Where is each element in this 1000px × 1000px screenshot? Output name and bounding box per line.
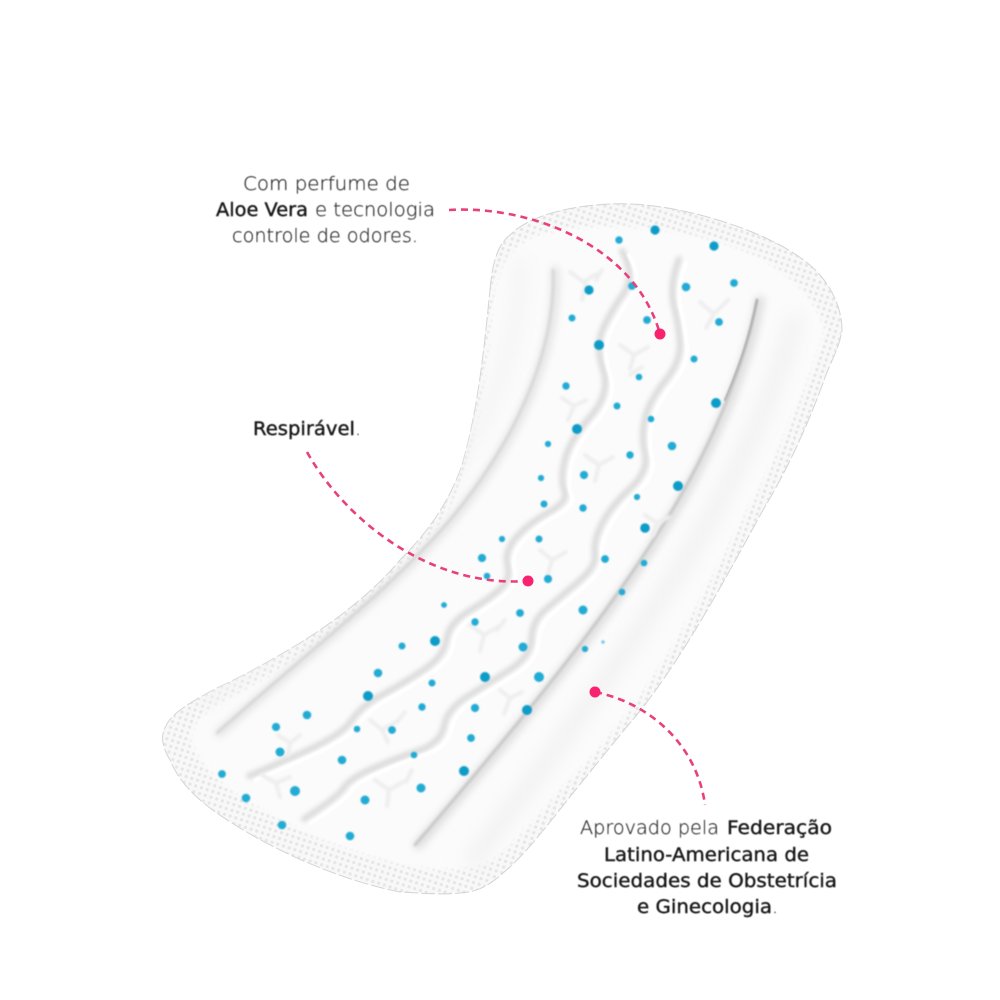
- text: approved callout: [577, 817, 837, 918]
- text: perfume callout: Aloe Vera: [216, 199, 308, 221]
- embossed channels: [217, 251, 757, 845]
- text: breathable callout: Respirável: [253, 418, 355, 440]
- text: perfume callout: Com perfume de: [243, 173, 410, 195]
- text: perfume callout: e tecnologia: [315, 199, 435, 221]
- text: perfume callout: [216, 173, 435, 247]
- sanitary pad: [163, 204, 842, 894]
- callout line: approved: [590, 686, 705, 805]
- soft shading bands: [205, 262, 795, 860]
- blue dots: [218, 225, 738, 840]
- text: approved callout: Aprovado pela: [580, 817, 719, 839]
- text: breathable callout: .: [355, 418, 361, 440]
- callout line: perfume: [449, 210, 666, 340]
- text: approved callout: Latino-Americana de: [604, 844, 809, 866]
- infographic canvas: [162, 175, 842, 918]
- text: approved callout: .: [772, 896, 778, 918]
- text: approved callout: e Ginecologia: [637, 896, 772, 918]
- embossed cross marks: [262, 270, 728, 806]
- callout line: breathable: [307, 452, 534, 586]
- text: approved callout: Federação: [727, 817, 832, 839]
- text: approved callout: Sociedades de Obstetrícia: [577, 870, 837, 892]
- text: perfume callout: controle de odores.: [232, 225, 418, 247]
